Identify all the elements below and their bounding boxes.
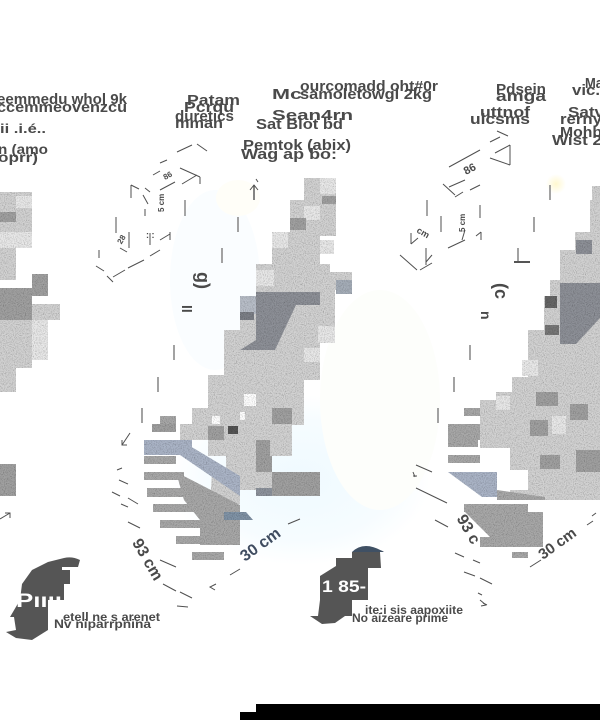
heading text: right column: Satv <box>568 104 600 121</box>
badge: left age marker <box>6 557 80 640</box>
right horse body <box>480 186 600 500</box>
label: box tick: : : <box>146 230 154 240</box>
arrow: centre horse top <box>250 179 258 200</box>
heading text: fourth column: amga <box>496 88 547 105</box>
heading text: left column: ccemmeovenzcu <box>0 99 127 116</box>
vertical height dashes: right horse <box>438 185 550 423</box>
heading text: right column: Mohb <box>560 124 600 141</box>
label: box depth: 5 cm <box>157 194 166 212</box>
heading text: right column: rerny <box>560 111 600 128</box>
heading text: left column: ii .i.é.. <box>0 121 46 136</box>
label: box side: 28 <box>115 233 128 246</box>
centre horse rocker <box>144 416 320 560</box>
height label: centre horse: ll <box>179 305 195 313</box>
heading text: second column <box>175 92 240 132</box>
caption: right badge: No aizeare prime <box>352 611 448 625</box>
heading text: centre column: Pemtok (abix) <box>243 137 351 154</box>
heading text: second column: Pcrqu <box>184 99 234 116</box>
label: box width: 86 <box>462 161 478 178</box>
label: box width: 86 <box>162 169 174 182</box>
heading text: centre column: Sat Blot bd <box>256 116 343 133</box>
heading text: centre column: ourcomadd oht#0r <box>300 78 438 95</box>
heading text: second column: Patam <box>187 92 240 109</box>
left horse fragment <box>0 192 60 496</box>
badge label: Pıııı <box>16 591 62 612</box>
height label: centre horse: g) <box>193 272 213 289</box>
heading text: centre column: Sean4rn <box>272 107 353 124</box>
badge label: 1 85- <box>322 577 366 596</box>
mane highlights <box>208 178 336 472</box>
caption: right badge <box>352 603 463 625</box>
heading text: fourth column <box>470 81 547 128</box>
heading text: centre column <box>241 78 438 163</box>
right base label: length: 93 c <box>453 512 483 547</box>
right horse rocker <box>448 408 545 558</box>
heading text: second column: duretics <box>175 108 234 125</box>
heading text: right column: Wist 2 <box>552 132 600 149</box>
heading text: second column: mman <box>175 115 223 132</box>
pale glow behind centre horse <box>170 174 566 565</box>
height label: right horse <box>478 262 530 320</box>
footer bar <box>240 704 600 720</box>
height label: centre horse <box>179 272 213 313</box>
dimension box: left packaging <box>96 144 207 282</box>
heading text: fourth column: ulcsms <box>470 111 530 128</box>
left base dimension lines <box>0 433 300 607</box>
heading text: fourth column: Pdsein <box>496 81 546 98</box>
right base dimension lines <box>413 465 596 606</box>
height label: right horse: (c <box>491 283 511 299</box>
right base label: width: 30 cm <box>535 524 580 563</box>
caption: right badge: ite:i sis aapoxiite <box>365 603 463 617</box>
centre horse body <box>180 178 352 504</box>
dimension box: right packaging <box>400 131 510 270</box>
heading text: left column <box>0 91 128 165</box>
height label: right horse: n <box>478 311 494 320</box>
caption: left badge: Nv niparrpnina <box>54 617 151 631</box>
caption: left badge: etell ne s arenet <box>63 610 160 624</box>
heading text: right column: vic. <box>572 82 600 99</box>
vertical height dashes: centre horse <box>142 185 254 423</box>
label: box depth: 5 cm <box>458 214 467 232</box>
caption: left badge <box>54 610 160 631</box>
saddle <box>240 292 320 350</box>
heading text: right column <box>552 75 600 149</box>
left base label: length: 93 cm <box>128 536 166 584</box>
badge: right age marker <box>310 546 384 624</box>
heading text: left column: eemmedu whol 9k <box>0 91 128 108</box>
heading text: centre column: Mc <box>272 86 302 103</box>
heading text: fourth column: uttnof <box>480 104 531 121</box>
left base label: width: 30 cm <box>237 525 284 565</box>
heading text: centre column: Wag ap bo: <box>241 146 337 163</box>
label: box side: cm <box>415 225 431 240</box>
heading text: centre column: samoletowgl 2kg <box>300 86 432 103</box>
